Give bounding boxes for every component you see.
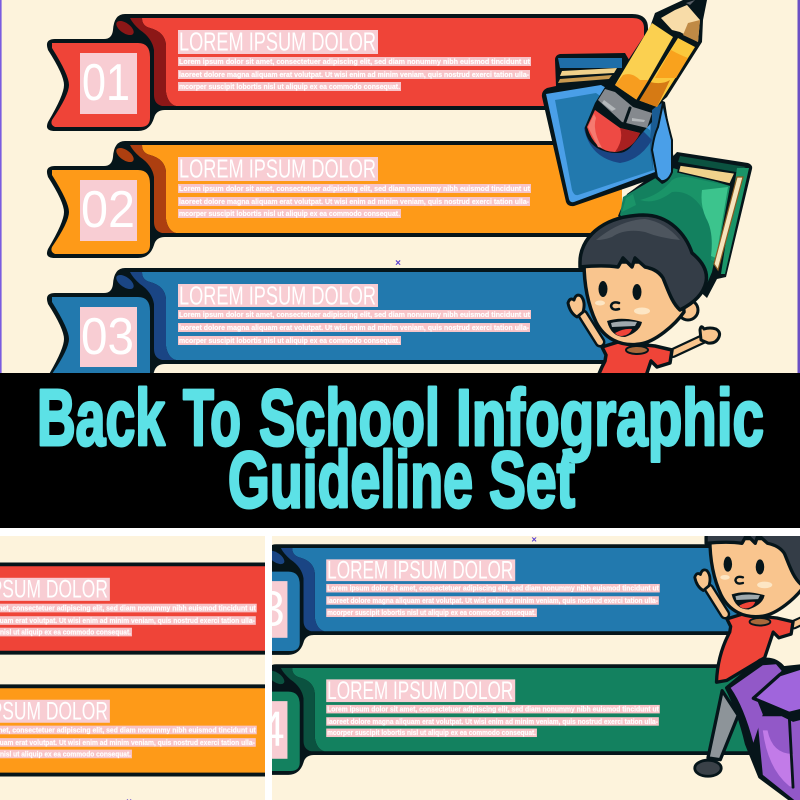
icon: green book bbox=[618, 152, 752, 298]
banner 03 blue: Lorem ipsum dolor sit amet, consectetuer adipiscing elit, sed diam nonummy nibh euismod tincidunt ut bbox=[179, 310, 531, 319]
boy mouth bbox=[607, 319, 642, 337]
banner 03 crop bbox=[272, 544, 738, 655]
banner 01 red: laoreet dolore magna aliquam erat volutpat. Ut wisi enim ad minim veniam, quis nostrud exerci tation ulla- bbox=[179, 70, 530, 79]
title line 2: Guideline bbox=[228, 435, 473, 524]
banner 01 red bbox=[47, 14, 648, 131]
panel: lower-right crop bbox=[272, 536, 800, 800]
banner 03 blue: LOREM IPSUM DOLOR bbox=[179, 280, 376, 310]
banner 02 orange: 02 bbox=[81, 181, 135, 239]
banner 03 blue: mcorper suscipit lobortis nisl ut aliquip ex ea commodo consequat. bbox=[179, 336, 400, 345]
banner 01 red: 01 bbox=[82, 54, 130, 112]
boy shirt bbox=[591, 342, 672, 414]
boy hair bbox=[580, 215, 706, 310]
icon: pencil bbox=[585, 0, 707, 153]
illustration: boy bbox=[568, 215, 720, 514]
banner 01 red: mcorper suscipit lobortis nisl ut aliquip ex ea commodo consequat. bbox=[179, 82, 400, 91]
panel: top artwork bbox=[0, 0, 800, 373]
title line 1: To bbox=[183, 373, 241, 462]
title band bbox=[0, 373, 800, 528]
boy cheeks bbox=[595, 300, 650, 314]
banner 04 green bbox=[272, 664, 750, 775]
title line 2: Set bbox=[489, 435, 575, 524]
icon: purple backpack bbox=[727, 660, 800, 800]
marker: small purple cross: × bbox=[531, 534, 537, 545]
boy collar bbox=[626, 346, 648, 354]
title line 1: Back bbox=[37, 373, 165, 462]
banner 03 blue: laoreet dolore magna aliquam erat volutpat. Ut wisi enim ad minim veniam, quis nostrud exerci tation ulla- bbox=[179, 323, 530, 332]
boy nose bbox=[611, 302, 619, 310]
banner 03 blue: 03 bbox=[81, 308, 134, 366]
marker: small purple cross: × bbox=[395, 258, 401, 269]
banner 02 orange bbox=[47, 141, 622, 258]
banner 01 red: LOREM IPSUM DOLOR bbox=[179, 26, 376, 56]
icon: blue book bbox=[542, 53, 674, 206]
banner 02 orange: Lorem ipsum dolor sit amet, consectetuer adipiscing elit, sed diam nonummy nibh euismod tincidunt ut bbox=[179, 184, 531, 193]
banner 02 crop bbox=[0, 684, 265, 776]
illustration: boy crop bbox=[693, 536, 800, 778]
banner 01 crop bbox=[0, 562, 265, 655]
banner 02 orange: mcorper suscipit lobortis nisl ut aliquip ex ea commodo consequat. bbox=[179, 209, 400, 218]
boy ear bbox=[678, 300, 698, 320]
title line 1 bbox=[37, 373, 764, 462]
banner 03 blue bbox=[47, 268, 620, 385]
boy arms bbox=[568, 295, 720, 353]
boy leg and shoe bbox=[568, 423, 614, 514]
banner 02 orange: LOREM IPSUM DOLOR bbox=[179, 154, 376, 184]
banner 02 orange: laoreet dolore magna aliquam erat volutpat. Ut wisi enim ad minim veniam, quis nostrud exerci tation ulla- bbox=[179, 197, 530, 206]
panel: lower-left crop bbox=[0, 536, 265, 800]
banner 01 red: Lorem ipsum dolor sit amet, consectetuer adipiscing elit, sed diam nonummy nibh euismod tincidunt ut bbox=[179, 57, 531, 66]
boy face bbox=[584, 262, 684, 345]
title line 1: School bbox=[259, 373, 440, 462]
boy eyes bbox=[598, 281, 642, 300]
